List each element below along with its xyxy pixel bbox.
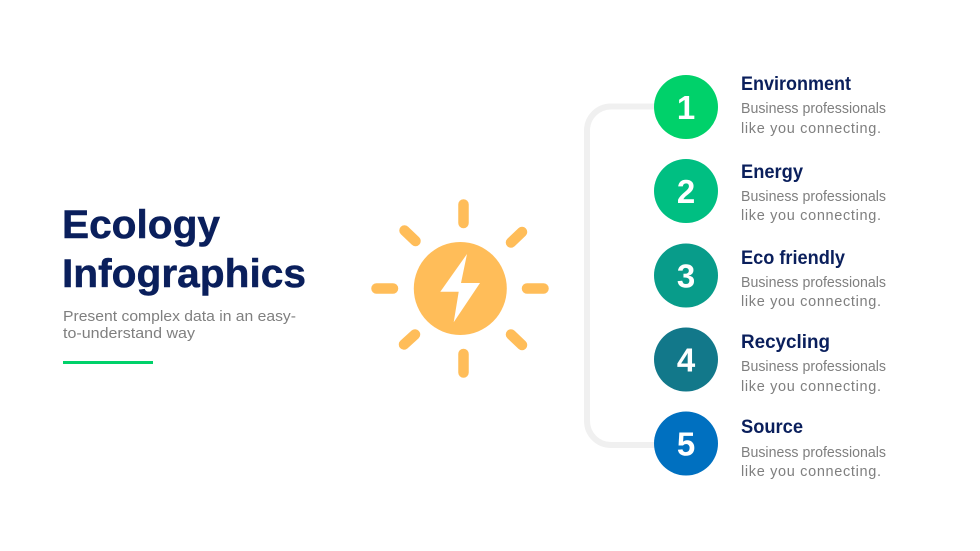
title: Ecology	[62, 203, 221, 247]
connector bracket	[587, 106, 660, 445]
title: Infographics	[62, 252, 306, 296]
item 5: Source: like you connecting.	[741, 464, 881, 480]
subtitle	[63, 309, 296, 342]
item 1: Environment: like you connecting.	[741, 121, 881, 137]
item 5: Source: Business professionals	[741, 445, 886, 461]
item 3: Eco friendly: Eco friendly	[741, 248, 845, 269]
item 1: Environment: Environment	[741, 74, 852, 95]
item 5: Source: Source	[741, 417, 803, 438]
icon: sun with lightning bolt	[376, 204, 544, 372]
item 4: Recycling: Business professionals	[741, 359, 886, 375]
item 4: Recycling: like you connecting.	[741, 379, 881, 395]
item 3: Eco friendly: Business professionals	[741, 275, 886, 291]
item 3: Eco friendly: 3	[677, 258, 695, 294]
item 2: Energy: like you connecting.	[741, 208, 881, 224]
item 3: Eco friendly	[654, 244, 886, 310]
item 4: Recycling: Recycling	[741, 332, 830, 353]
item 2: Energy: Business professionals	[741, 189, 886, 205]
item 3: Eco friendly: like you connecting.	[741, 294, 881, 310]
item 1: Environment: Business professionals	[741, 101, 886, 117]
title	[62, 203, 306, 296]
subtitle: to-understand way	[63, 326, 196, 342]
item 4: Recycling	[654, 328, 886, 395]
item 2: Energy: 2	[677, 173, 695, 210]
item 5: Source	[654, 412, 886, 480]
item 2: Energy	[654, 159, 886, 224]
item 2: Energy: Energy	[741, 162, 803, 183]
item 1: Environment: 1	[677, 89, 695, 126]
item 1: Environment	[654, 74, 886, 139]
item 5: Source: 5	[677, 426, 695, 462]
item 4: Recycling: 4	[677, 342, 696, 378]
subtitle: Present complex data in an easy-	[63, 309, 296, 325]
accent underline	[63, 361, 153, 364]
